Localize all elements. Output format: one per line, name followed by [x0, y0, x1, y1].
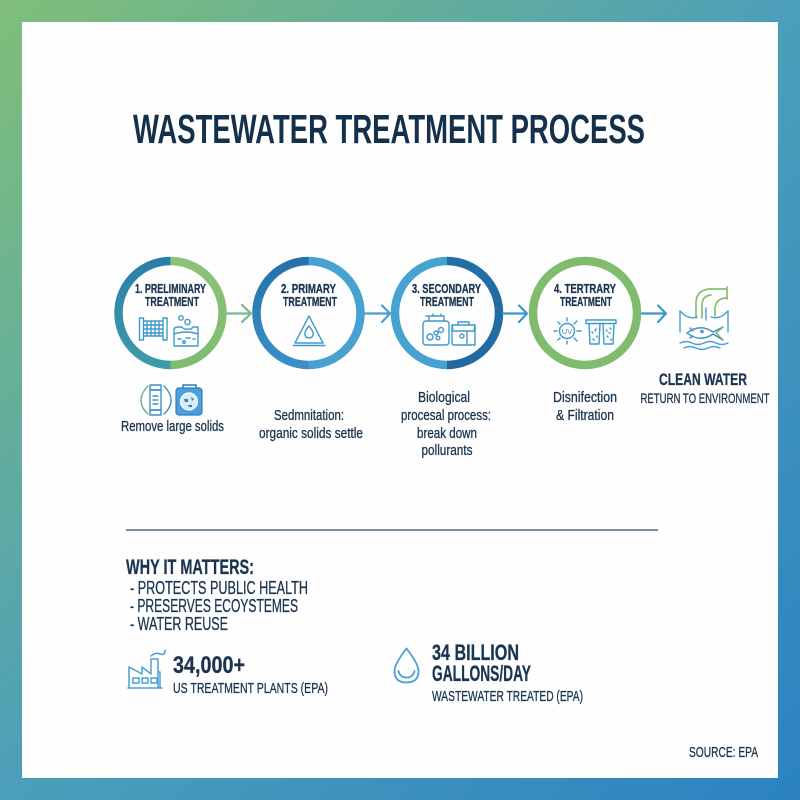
icon: grit tank — [174, 316, 198, 346]
step 3: secondary treatment — [395, 261, 499, 365]
step 2 description — [259, 408, 363, 442]
why it matters list — [130, 578, 308, 634]
step 3 description: Biological — [418, 390, 470, 406]
step 3 ring — [395, 261, 499, 365]
step 4 ring — [533, 261, 637, 365]
step 2: primary treatment — [256, 261, 360, 365]
icon: outfall pipe with fish — [680, 287, 728, 350]
pipe — [696, 287, 727, 318]
why it matters heading: WHY IT MATTERS: — [126, 556, 254, 579]
step 2 heading: TREATMENT — [283, 295, 337, 309]
why it matters list: - PROTECTS PUBLIC HEALTH — [130, 578, 308, 598]
step 3 description: procesal process: — [401, 408, 491, 424]
icon: bar screen — [140, 318, 167, 340]
water vessel — [680, 308, 728, 350]
step 3 description — [401, 390, 491, 459]
clean water label — [640, 370, 770, 406]
step 1 description: Remove large solids — [121, 419, 224, 435]
why it matters list: - PRESERVES ECOYSTEMES — [130, 596, 298, 616]
step 4 description: Disnifection — [553, 390, 617, 406]
icon: UV lamp: UV — [562, 327, 572, 336]
clean water label: CLEAN WATER — [659, 370, 747, 389]
stat: treatment plants — [128, 650, 328, 697]
step 2 heading: 2. PRIMARY — [281, 282, 337, 296]
divider — [126, 529, 658, 531]
icon: factory — [128, 650, 165, 688]
icon: aeration tank — [423, 314, 449, 345]
arrow: step 1 to 2 — [227, 305, 251, 322]
stat label: WASTEWATER TREATED (EPA) — [432, 688, 583, 705]
arrow: step 4 to clean water — [642, 306, 666, 322]
arrow: step 2 to 3 — [365, 306, 390, 322]
step 2 ring — [256, 261, 360, 365]
icon: filter tanks — [586, 320, 616, 344]
why it matters list: - WATER REUSE — [130, 614, 228, 634]
stat value: 34,000+ — [173, 652, 245, 679]
step 4 description — [553, 390, 617, 424]
icon: water drop — [394, 648, 418, 682]
step 1 heading: 1. PRELIMINARY — [135, 282, 206, 296]
step 3 heading: 3. SECONDARY — [412, 282, 481, 296]
step 4 description: & Filtration — [556, 408, 614, 424]
step 1 heading: TREATMENT — [145, 295, 199, 309]
stat label: US TREATMENT PLANTS (EPA) — [173, 680, 328, 697]
icon: clarifier box — [452, 322, 475, 345]
stat value — [432, 640, 531, 686]
step 4 heading: TREATMENT — [560, 295, 612, 309]
fish — [687, 327, 723, 340]
arrow: step 3 to 4 — [503, 306, 527, 322]
stat value: 34 BILLION — [432, 640, 519, 665]
icon: screening drum — [141, 385, 171, 415]
source note: SOURCE: EPA — [689, 745, 758, 761]
step 3 description: pollurants — [422, 443, 472, 459]
step 3 heading: TREATMENT — [420, 295, 474, 309]
step 3 heading — [412, 282, 481, 309]
step 4 heading — [554, 282, 616, 309]
icon: sedimentation cone — [294, 316, 325, 346]
why it matters block — [126, 556, 308, 634]
step 2 description: organic solids settle — [259, 426, 363, 442]
icon: blue container — [176, 385, 202, 415]
step 1 ring — [119, 261, 222, 365]
step 3 description: break down — [417, 426, 477, 442]
step 2 heading — [281, 282, 337, 309]
stat value: GALLONS/DAY — [432, 661, 531, 686]
step 1: preliminary treatment — [119, 261, 222, 365]
step 4 heading: 4. TERTRARY — [554, 282, 616, 296]
step 2 description: Sedmnitation: — [274, 408, 344, 424]
stat: gallons per day — [394, 640, 583, 705]
step 4: tertiary treatment — [533, 261, 637, 365]
step 1 heading — [135, 282, 206, 309]
